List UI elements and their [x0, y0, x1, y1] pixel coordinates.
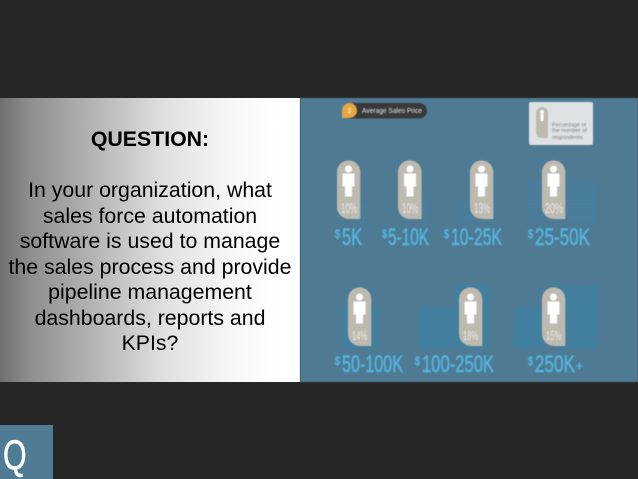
pill: 50-100K 14% [348, 287, 371, 346]
text block: question body: sales force automation [43, 204, 257, 228]
price labels: row 1: $ [528, 227, 533, 241]
panel: question [0, 98, 300, 382]
pill: 250K+ 15% [542, 287, 565, 346]
heading: question: QUESTION: [91, 127, 209, 151]
text block: question body: software is used to manage [20, 229, 280, 253]
price labels: row 1: 5-10K [388, 224, 429, 251]
pill: 25-50K 20%: 20% [545, 200, 563, 217]
legend: percentage of respondents: Percentage of [552, 122, 587, 128]
price labels: row 2: 250K [535, 351, 575, 378]
pill: 5-10K 10% [398, 160, 422, 219]
text block: question body: dashboards, reports and [35, 306, 265, 330]
price labels: row 1: 25-50K [535, 224, 590, 251]
legend: average sales price: Average Sales Price [362, 106, 422, 115]
text block: question body: KPIs? [122, 331, 178, 355]
pill: 50-100K 14%: 14% [352, 328, 367, 343]
legend: average sales price: $ [348, 108, 352, 115]
legend: percentage of respondents: the number of [552, 128, 588, 134]
price labels: row 1: 5K [342, 224, 362, 251]
price labels: row 2: $ [415, 354, 420, 368]
pill: 10-25K 13%: 13% [474, 200, 490, 217]
pill: 25-50K 20% [542, 160, 565, 219]
price labels: row 2: + [576, 359, 583, 373]
pill: 100-250K 18% [459, 287, 482, 346]
price labels: row 2 [335, 351, 583, 378]
legend: percentage of respondents: respondents. [552, 135, 584, 141]
background bars: row 2 [342, 285, 598, 348]
price labels: row 2: $ [335, 354, 340, 368]
price labels: row 1: $ [382, 227, 387, 241]
legend: percentage of respondents [529, 102, 593, 145]
text block: question body: the sales process and provide [9, 254, 291, 278]
logo: Q tab: Q [3, 431, 27, 478]
price labels: row 1: 10-25K [451, 224, 502, 251]
pill: 5-10K 10%: 10% [402, 200, 418, 217]
pill: 250K+ 15%: 15% [546, 328, 561, 343]
price labels: row 2: 50-100K [342, 351, 403, 378]
pill: 5K 10% [337, 160, 360, 219]
text block: question body: In your organization, what [28, 178, 272, 202]
price labels: row 1 [335, 224, 590, 251]
logo: Q tab [0, 425, 53, 479]
pill: 5K 10%: 10% [341, 200, 357, 217]
pill: 10-25K 13% [470, 160, 493, 219]
price labels: row 1: $ [335, 227, 340, 241]
text block: question body: pipeline management [48, 280, 252, 304]
legend: average sales price [342, 103, 427, 118]
price labels: row 2: 100-250K [422, 351, 494, 378]
price labels: row 2: $ [528, 354, 533, 368]
text block: question body [8, 178, 291, 355]
price labels: row 1: $ [444, 227, 449, 241]
pill: 100-250K 18%: 18% [463, 328, 478, 343]
background bars: row 1 [358, 181, 597, 223]
